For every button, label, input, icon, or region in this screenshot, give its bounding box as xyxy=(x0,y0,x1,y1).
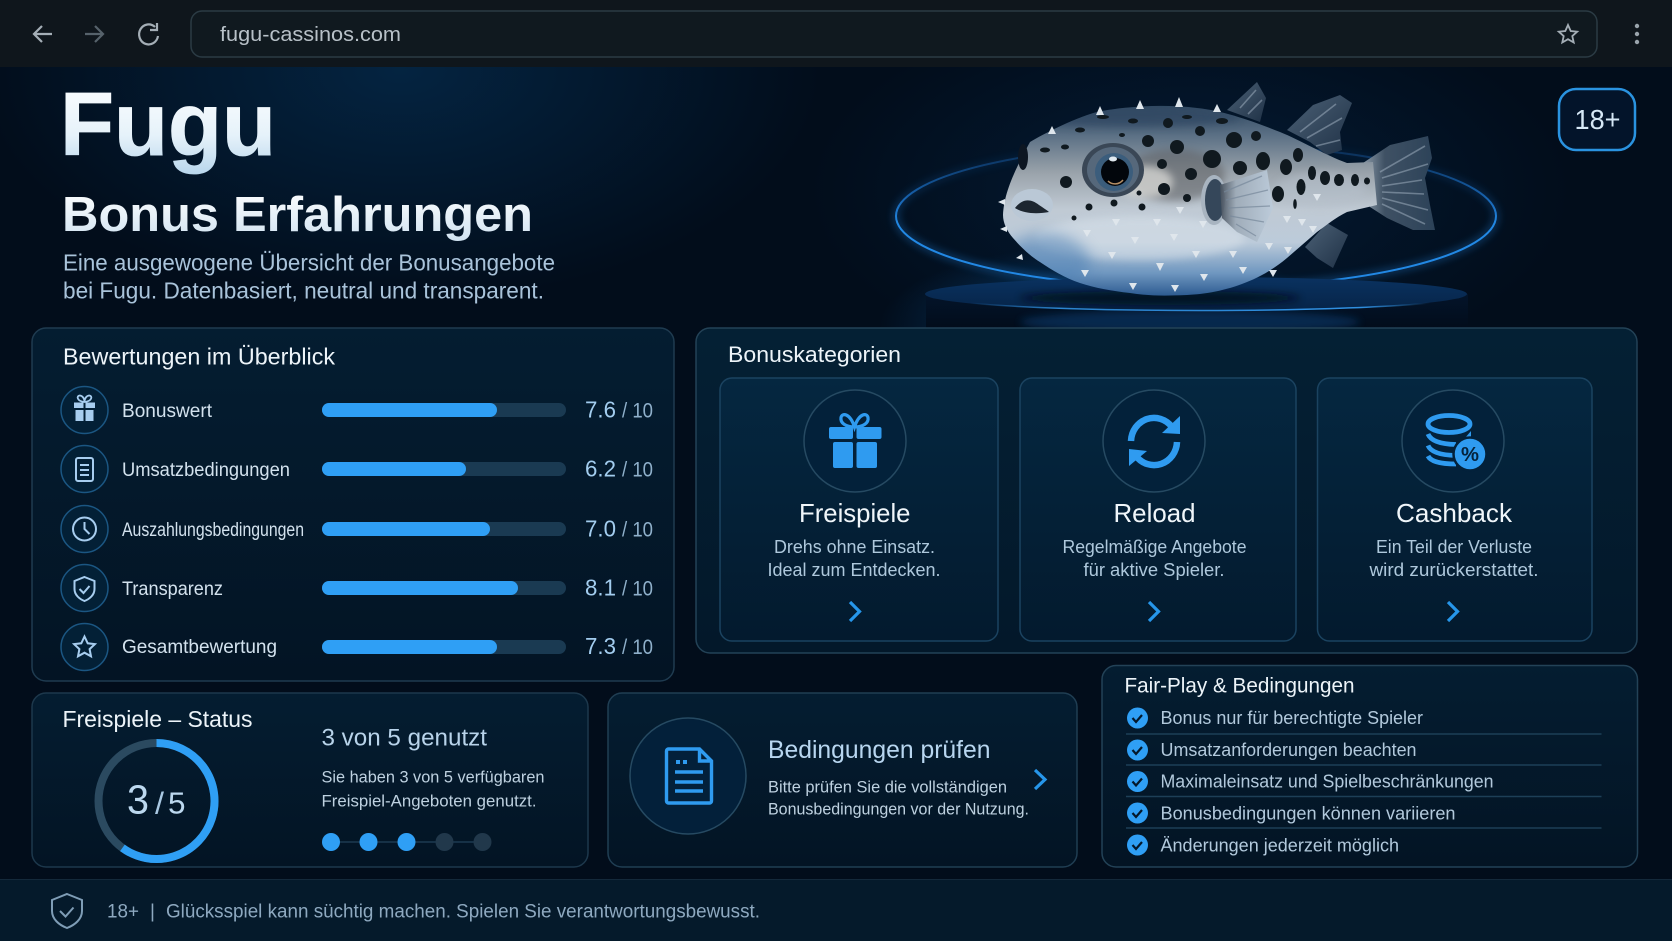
row: Transparenz: / 10 xyxy=(622,578,653,600)
checklist: Umsatzanforderungen beachten xyxy=(1160,740,1416,760)
checklist: Änderungen jederzeit möglich xyxy=(1160,836,1399,856)
icon: reload xyxy=(139,23,158,44)
intro text: Eine ausgewogene Übersicht der Bonusangebote xyxy=(63,250,555,276)
row: Auszahlungsbedingungen: Auszahlungsbedingungen xyxy=(122,520,304,541)
panel heading: Fair-Play & Bedingungen xyxy=(1124,674,1354,698)
row: Auszahlungsbedingungen xyxy=(61,506,653,552)
row: Transparenz: Transparenz xyxy=(122,579,223,600)
row: Transparenz xyxy=(61,564,653,612)
age badge xyxy=(1559,89,1635,150)
progress dots xyxy=(322,833,492,851)
card: Freispiele: Drehs ohne Einsatz. xyxy=(774,537,935,557)
donut chart: / xyxy=(155,786,164,820)
icon: menu dots xyxy=(1635,24,1639,44)
icon: chevron xyxy=(1035,770,1045,789)
address bar xyxy=(191,11,1597,57)
panel: free spins status xyxy=(32,693,588,867)
status text: Sie haben 3 von 5 verfügbaren xyxy=(322,768,544,786)
icon: coins and percent xyxy=(1428,416,1486,470)
card: Cashback: wird zurückerstattet. xyxy=(1368,560,1538,580)
panel: check conditions: Bedingungen prüfen xyxy=(768,736,990,764)
card: Cashback: Cashback xyxy=(1396,498,1513,528)
panel: bonus categories xyxy=(696,328,1637,653)
card: Reload xyxy=(1020,378,1296,641)
row: Auszahlungsbedingungen: / 10 xyxy=(622,518,653,542)
checklist: Bonus nur für berechtigte Spieler xyxy=(1160,708,1423,728)
card: Freispiele: Freispiele xyxy=(799,498,910,528)
url text: fugu-cassinos.com xyxy=(220,23,401,46)
platform column xyxy=(926,294,1468,330)
panel heading: Bewertungen im Überblick xyxy=(63,344,336,370)
icon: coins and percent: % xyxy=(1461,444,1479,466)
subtitle heading: Bonus Erfahrungen xyxy=(62,188,533,242)
age badge: 18+ xyxy=(1574,104,1620,135)
panel heading: Bonuskategorien xyxy=(728,342,901,367)
row: Umsatzbedingungen: Umsatzbedingungen xyxy=(122,460,290,481)
card: Reload: Regelmäßige Angebote xyxy=(1062,537,1246,557)
row: Transparenz: 8.1 xyxy=(585,574,616,600)
icon: gift xyxy=(829,415,882,468)
checklist: Bonusbedingungen können variieren xyxy=(1160,804,1456,824)
intro text xyxy=(63,250,555,304)
panel: check conditions: Bitte prüfen Sie die vollständigen xyxy=(768,778,1007,796)
speckled and silver shading xyxy=(1125,149,1225,201)
intro text: bei Fugu. Datenbasiert, neutral und transparent. xyxy=(63,278,544,304)
panel heading: Freispiele – Status xyxy=(62,706,252,732)
icon: bookmark star xyxy=(1559,25,1577,43)
row: Bonuswert xyxy=(61,386,653,434)
platform disc xyxy=(925,277,1467,311)
status heading: 3 von 5 genutzt xyxy=(322,724,487,752)
icon: reload arrows xyxy=(1129,416,1180,466)
panel: check conditions xyxy=(608,693,1077,867)
donut chart: 5 xyxy=(168,786,186,820)
row: Umsatzbedingungen: / 10 xyxy=(622,458,653,482)
fins xyxy=(1227,82,1266,122)
panel: ratings overview xyxy=(32,328,674,681)
mouth xyxy=(1011,189,1053,221)
icon: shield xyxy=(52,894,82,928)
status text: Freispiel-Angeboten genutzt. xyxy=(322,792,536,810)
spots xyxy=(1040,115,1370,220)
panel: fair play and conditions xyxy=(1102,666,1638,867)
fish shadow xyxy=(1020,291,1300,305)
disclaimer text: Glücksspiel kann süchtig machen. Spielen Sie verantwortungsbewusst. xyxy=(166,902,760,922)
browser bar xyxy=(0,0,1672,67)
icon: document xyxy=(666,749,712,803)
row: Bonuswert: 7.6 xyxy=(585,396,616,422)
gill and pectoral fin xyxy=(1201,175,1227,225)
row: Bonuswert: Bonuswert xyxy=(122,401,213,422)
icon: chevron xyxy=(1448,602,1458,621)
panel: check conditions: Bonusbedingungen vor der Nutzung. xyxy=(768,800,1029,818)
row: Umsatzbedingungen: 6.2 xyxy=(585,456,616,482)
disclaimer text: | xyxy=(150,902,155,922)
status text xyxy=(322,768,544,810)
far eye xyxy=(1018,144,1028,170)
body xyxy=(1003,106,1377,296)
card: Freispiele: Ideal zum Entdecken. xyxy=(768,560,940,580)
title: Fugu xyxy=(60,75,276,175)
donut chart: 3 xyxy=(127,776,149,822)
row: Bonuswert: / 10 xyxy=(622,400,653,422)
row: Umsatzbedingungen xyxy=(61,446,653,492)
icon: back arrow xyxy=(34,26,52,42)
fish illustration on platform xyxy=(896,82,1496,334)
card: Cashback xyxy=(1318,378,1592,641)
glowing ring xyxy=(896,144,1496,288)
footer disclaimer xyxy=(0,879,1672,941)
checklist: Maximaleinsatz und Spielbeschränkungen xyxy=(1160,772,1494,792)
donut chart xyxy=(98,743,215,859)
spikes xyxy=(998,97,1321,292)
icon: chevron xyxy=(850,602,860,621)
icon: forward arrow xyxy=(85,26,103,42)
row: Gesamtbewertung: Gesamtbewertung xyxy=(122,637,277,658)
row: Gesamtbewertung xyxy=(61,624,653,670)
card: Reload: Reload xyxy=(1114,498,1196,528)
checklist xyxy=(1127,708,1494,856)
row: Gesamtbewertung: / 10 xyxy=(622,636,653,659)
card: Cashback: Ein Teil der Verluste xyxy=(1376,537,1532,557)
card: Reload: für aktive Spieler. xyxy=(1084,560,1224,580)
eye xyxy=(1082,143,1144,197)
row: Gesamtbewertung: 7.3 xyxy=(585,633,616,659)
row: Auszahlungsbedingungen: 7.0 xyxy=(585,516,616,542)
icon: chevron xyxy=(1149,602,1158,621)
disclaimer text: 18+ xyxy=(107,902,139,922)
card: Freispiele xyxy=(720,378,998,641)
